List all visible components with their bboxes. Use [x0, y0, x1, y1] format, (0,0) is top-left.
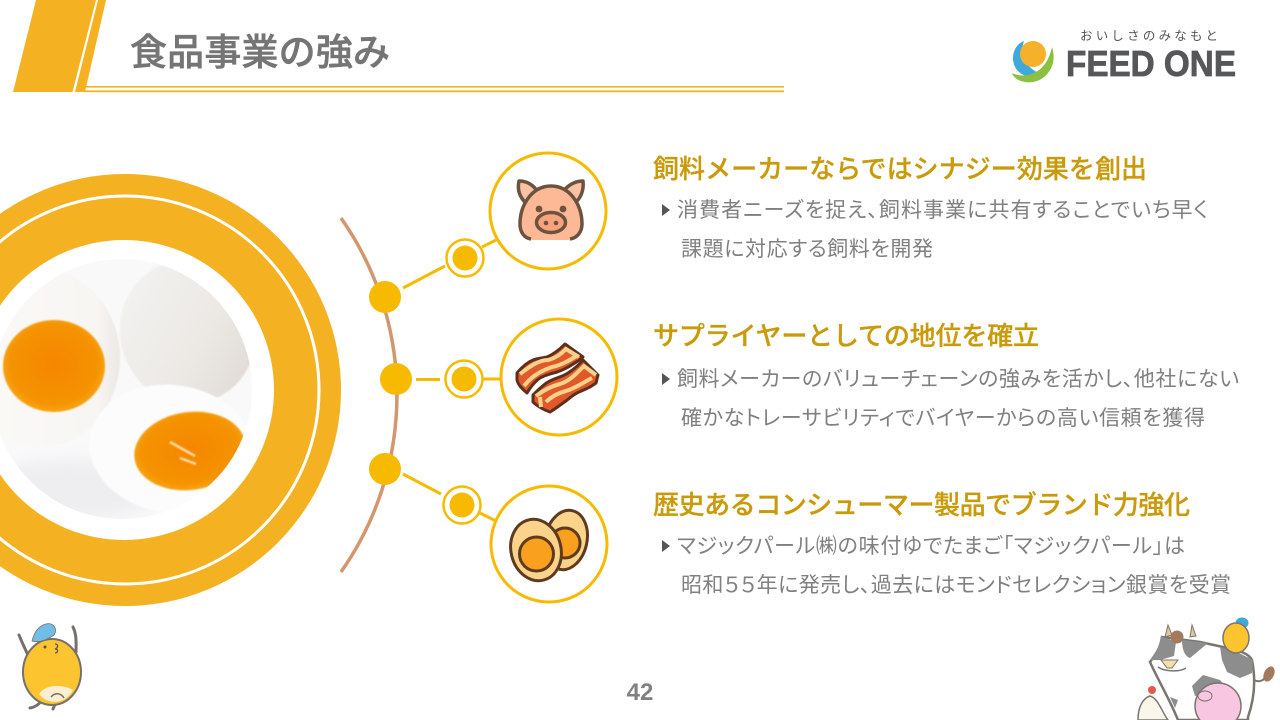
- logo tagline: おいしさのみなもと: [1080, 29, 1218, 43]
- heading 1: 飼料メーカーならではシナジー効果を創出: [653, 154, 1147, 184]
- item 1: [653, 154, 1208, 261]
- item 3: [653, 490, 1231, 597]
- photo: soft-boiled eggs: [0, 265, 250, 519]
- header banner: [13, 0, 784, 92]
- description 3: 昭和５５年に発売し、過去にはモンドセレクション銀賞を受賞: [681, 574, 1231, 597]
- page number: 42: [627, 679, 653, 706]
- logo wordmark: FEED ONE: [1066, 43, 1236, 84]
- icon: bacon: [501, 319, 617, 435]
- concentric rings with egg photo: [0, 174, 341, 606]
- mascot: cow, chick, pig and hen: [1138, 618, 1277, 720]
- description 2: [677, 368, 1239, 430]
- connector 1: [369, 239, 498, 313]
- description 1: [677, 199, 1208, 261]
- description 1: 課題に対応する飼料を開発: [681, 238, 933, 261]
- icon: pig: [490, 153, 606, 269]
- title: 食品事業の強み: [130, 32, 390, 73]
- description 2: 飼料メーカーのバリューチェーンの強みを活かし、他社にない: [677, 368, 1239, 391]
- logo mark: [1013, 41, 1053, 81]
- bullet 1: [662, 204, 670, 216]
- item 2: [653, 321, 1239, 430]
- arc connector: [341, 218, 397, 572]
- connector 2: [380, 360, 502, 398]
- connector 3: [369, 453, 496, 524]
- heading 3: 歴史あるコンシューマー製品でブランド力強化: [653, 490, 1190, 520]
- logo: FEED ONE: [1013, 29, 1236, 84]
- description 1: 消費者ニーズを捉え、飼料事業に共有することでいち早く: [677, 199, 1208, 222]
- mascot: chick with bird: [19, 624, 81, 709]
- bullet 2: [662, 373, 670, 385]
- description 3: マジックパール㈱の味付ゆでたまご「マジックパール」は: [677, 535, 1185, 558]
- bullet 3: [662, 540, 670, 552]
- description 3: [677, 535, 1231, 597]
- description 2: 確かなトレーサビリティでバイヤーからの高い信頼を獲得: [681, 407, 1205, 430]
- icon: boiled eggs: [491, 486, 607, 602]
- heading 2: サプライヤーとしての地位を確立: [653, 321, 1039, 351]
